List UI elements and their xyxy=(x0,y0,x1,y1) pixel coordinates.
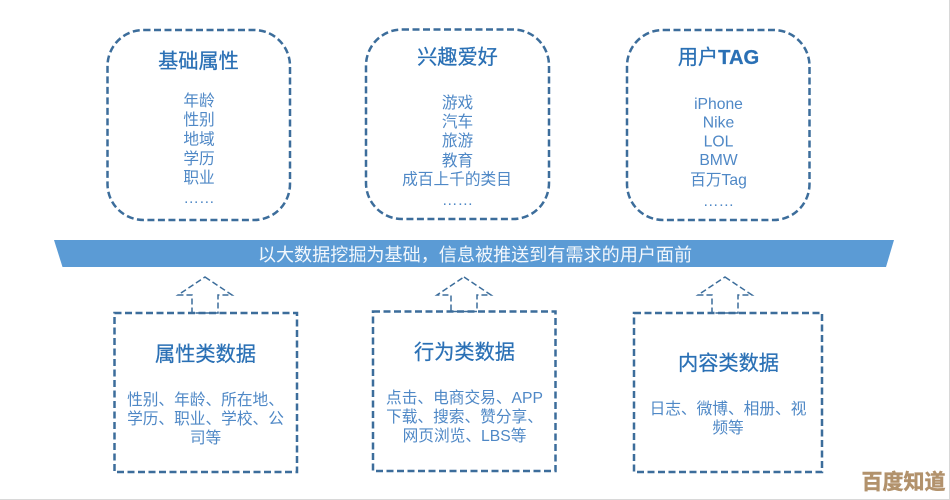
text: 内容类数据 description: 日志、微博、相册、视 xyxy=(650,400,807,418)
text: 行为类数据 description xyxy=(386,389,543,445)
list: 用户TAG items xyxy=(690,96,747,210)
list: 基础属性 items: 学历 xyxy=(183,150,215,168)
banner text: 以大数据挖掘为基础，信息被推送到有需求的用户面前 xyxy=(258,245,692,265)
text: 行为类数据 description: 下载、搜索、赞分享、 xyxy=(386,408,543,426)
panel: 基础属性 xyxy=(108,30,290,220)
list: 兴趣爱好 items xyxy=(402,94,512,209)
arrow: 属性类数据 up xyxy=(178,277,232,313)
list: 基础属性 items: 地域 xyxy=(183,130,215,148)
list: 用户TAG items: Nike xyxy=(703,114,734,132)
list: 兴趣爱好 items: 游戏 xyxy=(442,94,473,112)
heading: 属性类数据: 属性类数据 xyxy=(155,343,256,366)
list: 兴趣爱好 items: 汽车 xyxy=(442,113,473,131)
heading: 兴趣爱好: 兴趣爱好 xyxy=(417,46,498,69)
panel: 兴趣爱好 xyxy=(366,30,549,219)
watermark: 百度知道: 百度知道 xyxy=(862,466,946,496)
list: 用户TAG items: iPhone xyxy=(694,96,743,113)
arrow: 行为类数据 up xyxy=(437,277,491,312)
list: 用户TAG items: 百万Tag xyxy=(690,172,747,189)
list: 兴趣爱好 items: 成百上千的类目 xyxy=(402,170,512,188)
panel: 行为类数据 xyxy=(373,312,556,471)
list: 用户TAG items: …… xyxy=(703,193,734,210)
list: 用户TAG items: LOL xyxy=(704,134,734,150)
list: 兴趣爱好 items: 旅游 xyxy=(442,132,473,150)
text: 行为类数据 description: 点击、电商交易、APP xyxy=(386,389,543,407)
banner xyxy=(54,240,894,267)
list: 基础属性 items xyxy=(183,92,215,207)
list: 兴趣爱好 items: 教育 xyxy=(442,152,473,170)
text: 属性类数据 description: 司等 xyxy=(190,429,221,447)
panel: 内容类数据 xyxy=(634,313,822,472)
panel: 用户TAG xyxy=(627,30,810,220)
text: 行为类数据 description: 网页浏览、LBS等 xyxy=(403,427,526,445)
list: 基础属性 items: …… xyxy=(183,190,215,207)
panel: 属性类数据 xyxy=(114,313,297,472)
heading: 基础属性: 基础属性 xyxy=(158,50,239,73)
text: 内容类数据 description: 频等 xyxy=(712,419,744,437)
list: 基础属性 items: 职业 xyxy=(183,169,215,187)
text: 内容类数据 description xyxy=(650,400,807,437)
arrow: 内容类数据 up xyxy=(698,277,752,313)
text: 属性类数据 description: 学历、职业、学校、公 xyxy=(127,410,284,428)
heading: 行为类数据: 行为类数据 xyxy=(414,341,515,364)
heading: 用户TAG: 用户TAG xyxy=(678,46,759,69)
list: 基础属性 items: 性别 xyxy=(183,111,215,129)
text: 属性类数据 description xyxy=(127,391,284,447)
list: 兴趣爱好 items: …… xyxy=(442,192,473,209)
heading: 内容类数据: 内容类数据 xyxy=(678,352,779,375)
text: 属性类数据 description: 性别、年龄、所在地、 xyxy=(127,391,284,409)
list: 基础属性 items: 年龄 xyxy=(183,92,215,110)
list: 用户TAG items: BMW xyxy=(699,152,738,169)
